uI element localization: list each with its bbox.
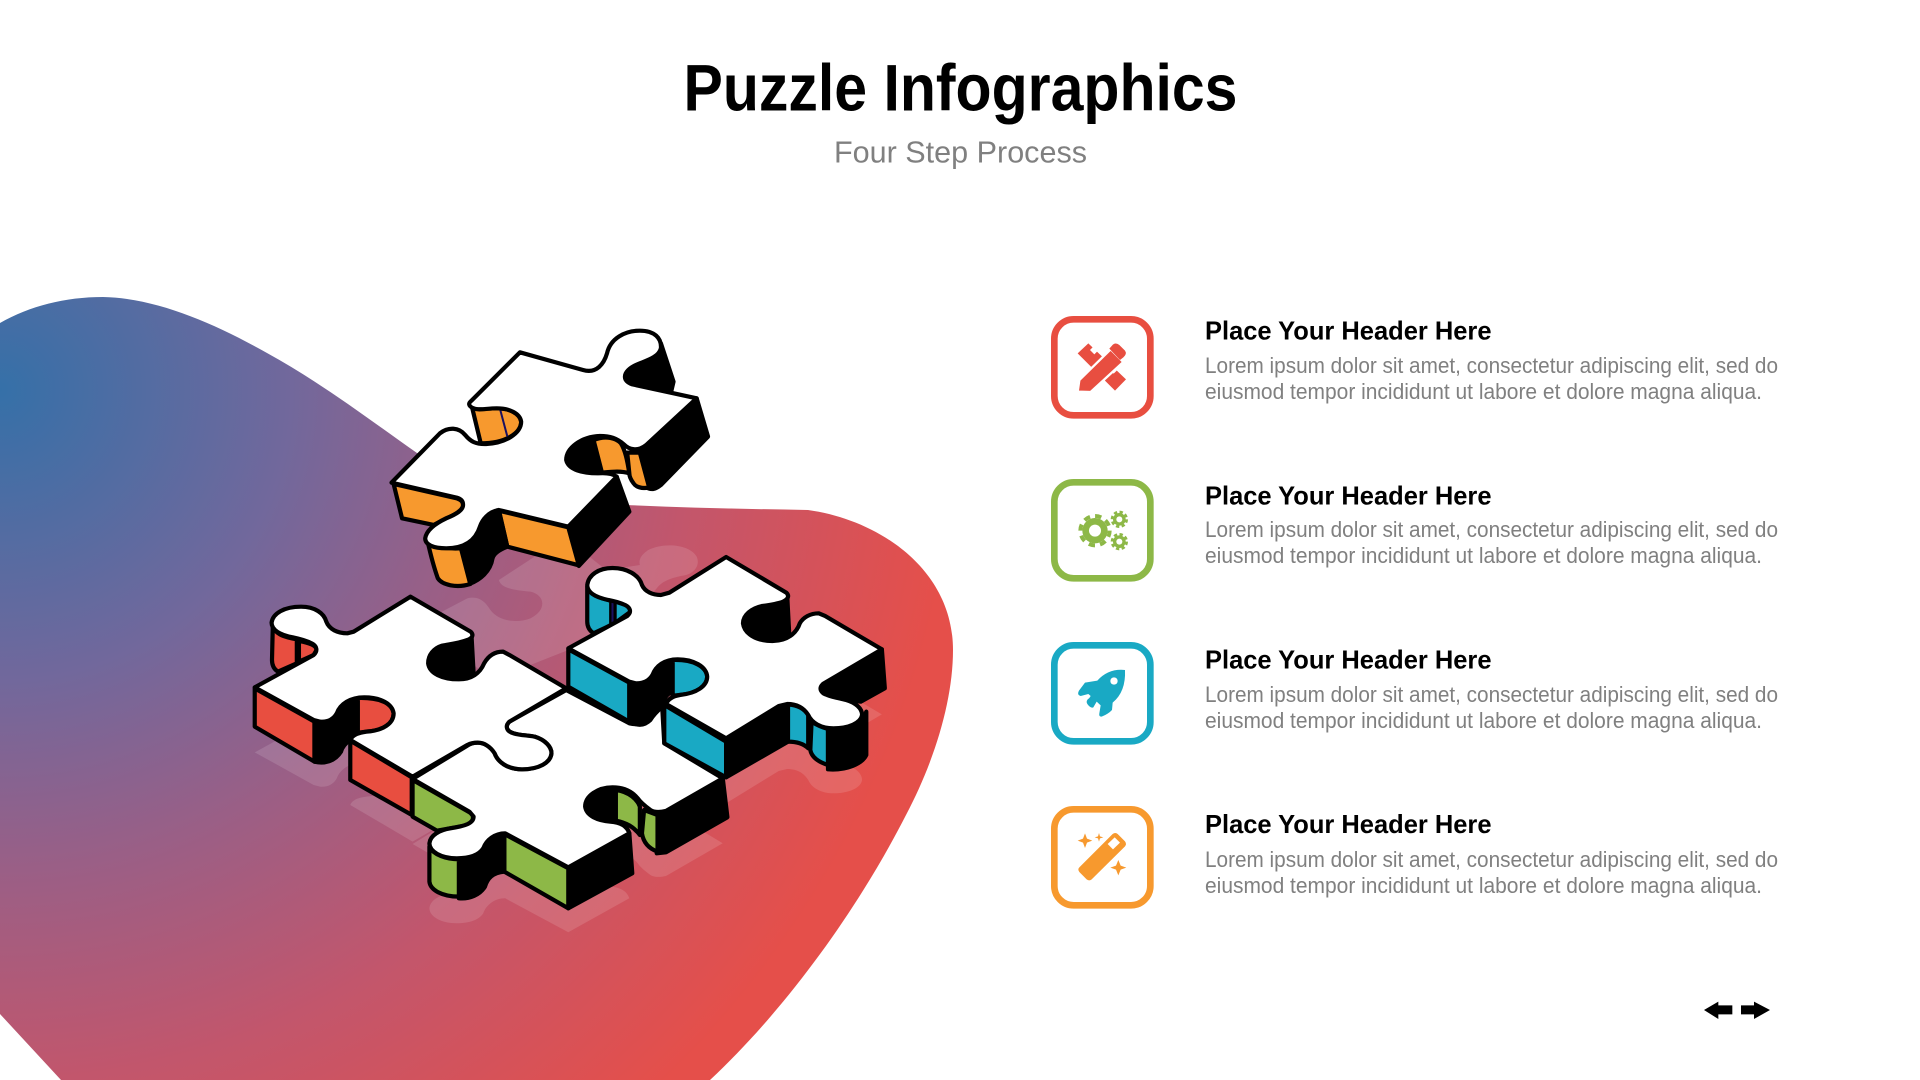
step 4 header: Place Your Header Here	[1205, 811, 1492, 839]
step 2 row	[1054, 482, 1778, 578]
icon badge: red pencil and ruler	[1054, 319, 1150, 415]
step 4 row	[1054, 809, 1778, 905]
step 4 body text: Lorem ipsum dolor sit amet, consectetur adipiscing elit, sed do	[1205, 847, 1778, 872]
icon badge: orange magic wand	[1054, 809, 1150, 905]
step 2 body text: eiusmod tempor incididunt ut labore et dolore magna aliqua.	[1205, 543, 1762, 568]
icon badge: green gears	[1054, 482, 1150, 578]
icon badge: blue rocket	[1054, 645, 1150, 741]
step 1 body text: eiusmod tempor incididunt ut labore et dolore magna aliqua.	[1205, 379, 1762, 404]
step 2 header: Place Your Header Here	[1205, 482, 1492, 510]
gradient background blob	[0, 297, 953, 1080]
step 3 row	[1054, 645, 1778, 741]
navigation arrows	[1704, 1002, 1770, 1019]
title: Puzzle Infographics	[684, 50, 1238, 124]
subtitle: Four Step Process	[834, 136, 1087, 170]
puzzle shadows on ground	[255, 545, 882, 932]
step 2 body text: Lorem ipsum dolor sit amet, consectetur adipiscing elit, sed do	[1205, 517, 1778, 542]
step 4 body text: eiusmod tempor incididunt ut labore et dolore magna aliqua.	[1205, 873, 1762, 898]
puzzle piece: green	[255, 597, 727, 908]
step 3 body text: Lorem ipsum dolor sit amet, consectetur adipiscing elit, sed do	[1205, 682, 1778, 707]
step 3 header: Place Your Header Here	[1205, 646, 1492, 674]
step 3 body text: eiusmod tempor incididunt ut labore et dolore magna aliqua.	[1205, 708, 1762, 733]
step 1 body text: Lorem ipsum dolor sit amet, consectetur adipiscing elit, sed do	[1205, 353, 1778, 378]
puzzle piece: blue	[568, 557, 885, 777]
puzzle piece: red	[255, 625, 474, 815]
step 1 header: Place Your Header Here	[1205, 318, 1492, 346]
step 1 row	[1054, 318, 1778, 415]
puzzle piece: orange	[392, 331, 708, 586]
